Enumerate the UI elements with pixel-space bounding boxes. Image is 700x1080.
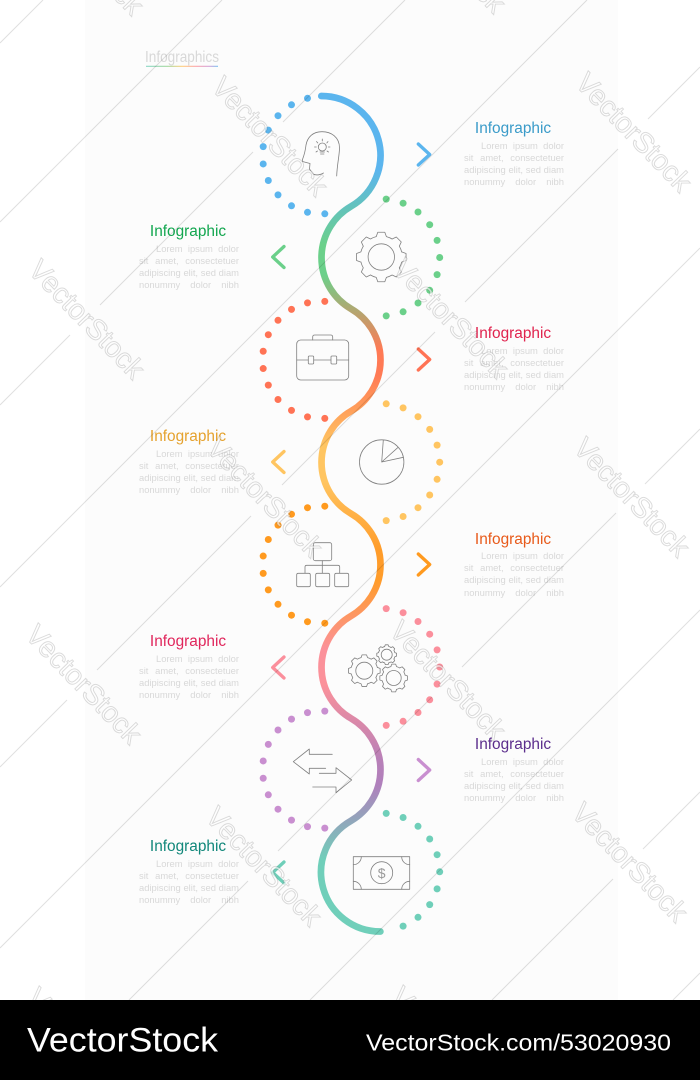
watermarks: VectorStock — [205, 71, 334, 203]
body: teal: Lorem ipsum dolor — [156, 858, 239, 869]
icon: org chart — [297, 543, 349, 587]
body: orange: nonummy dolor nibh — [464, 587, 564, 598]
arrow: yellow chevron — [273, 452, 284, 472]
body: crimson — [139, 653, 239, 700]
body: orange: Lorem ipsum dolor — [481, 550, 564, 561]
body: blue: nonummy dolor nibh — [464, 176, 564, 187]
body: gold: Lorem ipsum dolor — [156, 448, 239, 459]
icon: head with light bulb — [302, 132, 340, 176]
body: purple: adipiscing elit, sed diam — [464, 780, 564, 791]
body: orange — [464, 550, 564, 598]
body: gold: nonummy dolor nibh — [139, 484, 239, 495]
watermarks: VectorStock — [569, 67, 698, 199]
text block: green — [139, 223, 239, 290]
arrow: red chevron — [418, 349, 430, 370]
body: purple: Lorem ipsum dolor — [481, 756, 564, 767]
title: teal: Infographic — [150, 838, 226, 855]
text block: teal — [139, 838, 239, 905]
watermarks: VectorStock — [19, 619, 148, 751]
body: gold — [139, 448, 239, 495]
icon: banknote — [353, 857, 410, 889]
body: red: sit amet, consectetuer — [464, 357, 564, 368]
wavy gradient timeline — [321, 96, 380, 932]
background panel — [85, 0, 618, 1000]
body: red: adipiscing elit, sed diam — [464, 369, 564, 380]
body: green: nonummy dolor nibh — [139, 279, 239, 290]
arrow: purple chevron — [418, 760, 430, 780]
body: purple: nonummy dolor nibh — [464, 792, 564, 803]
title: red: Infographic — [475, 325, 551, 342]
body: purple — [464, 756, 564, 803]
body: teal: sit amet, consectetuer — [139, 870, 239, 881]
body: blue: sit amet, consectetuer — [464, 152, 564, 163]
text block: gold — [139, 428, 239, 495]
dotted circle: teal — [383, 810, 443, 930]
body: gold: sit amet, consectetuer — [139, 460, 239, 471]
body: teal: adipiscing elit, sed diam — [139, 882, 239, 893]
dotted circle: purple — [260, 708, 328, 832]
body: orange: sit amet, consectetuer — [464, 562, 564, 573]
dotted circle: green — [383, 196, 443, 319]
text block: crimson — [139, 633, 239, 700]
arrow: teal chevron — [273, 862, 284, 883]
title: blue: Infographic — [475, 120, 551, 137]
title: green: Infographic — [150, 223, 226, 240]
body: orange: adipiscing elit, sed diam — [464, 574, 564, 585]
title: crimson: Infographic — [150, 633, 226, 650]
watermarks: VectorStock — [200, 432, 329, 564]
dotted circle: pink — [383, 605, 443, 729]
body: green — [139, 243, 239, 290]
text block: red — [464, 325, 564, 392]
icon: gear — [356, 232, 406, 282]
body: crimson: adipiscing elit, sed diam — [139, 677, 239, 688]
watermarks: VectorStock — [22, 254, 151, 386]
icon: three gears — [348, 645, 408, 692]
icon: pie chart — [360, 440, 404, 484]
watermarks: VectorStock — [383, 615, 512, 747]
body: green: sit amet, consectetuer — [139, 255, 239, 266]
body: green: adipiscing elit, sed diam — [139, 267, 239, 278]
title: purple: Infographic — [475, 736, 551, 753]
watermarks: VectorStock — [386, 253, 515, 385]
body: purple: sit amet, consectetuer — [464, 768, 564, 779]
body: red: Lorem ipsum dolor — [481, 345, 564, 356]
text block: blue — [464, 120, 564, 187]
body: blue: adipiscing elit, sed diam — [464, 164, 564, 175]
body: red: nonummy dolor nibh — [464, 381, 564, 392]
body: blue: Lorem ipsum dolor — [481, 140, 564, 151]
watermarks: VectorStock — [199, 801, 328, 933]
icon: banknote: $ — [378, 865, 386, 881]
arrow: blue chevron — [418, 144, 430, 165]
title: orange: Infographic — [475, 531, 551, 548]
icon: briefcase — [297, 335, 349, 380]
body: green: Lorem ipsum dolor — [156, 243, 239, 254]
body: teal: nonummy dolor nibh — [139, 894, 239, 905]
text block: orange — [464, 531, 564, 598]
watermarks: VectorStock — [567, 432, 696, 564]
body: crimson: nonummy dolor nibh — [139, 689, 239, 700]
body: red — [464, 345, 564, 392]
body: crimson: sit amet, consectetuer — [139, 665, 239, 676]
watermarks: VectorStock — [565, 797, 694, 929]
arrow: pink chevron — [273, 657, 284, 678]
body: crimson: Lorem ipsum dolor — [156, 653, 239, 664]
text block: purple — [464, 736, 564, 803]
footer logo text: VectorStock — [27, 1022, 219, 1060]
dotted circle: blue — [260, 95, 328, 217]
dotted circle: red — [260, 298, 328, 422]
body: blue — [464, 140, 564, 187]
body: teal — [139, 858, 239, 905]
arrow: orange chevron — [418, 554, 430, 575]
dotted circle: yellow — [383, 400, 443, 524]
body: gold: adipiscing elit, sed diam — [139, 472, 239, 483]
title: gold: Infographic — [150, 428, 226, 445]
dotted circle: orange — [260, 503, 328, 627]
icon: exchange arrows — [293, 749, 352, 793]
footer bar — [0, 1000, 700, 1080]
footer url text: VectorStock.com/53020930 — [366, 1030, 671, 1056]
arrow: green chevron — [273, 246, 284, 268]
heading: Infographics: Infographics — [145, 49, 219, 66]
